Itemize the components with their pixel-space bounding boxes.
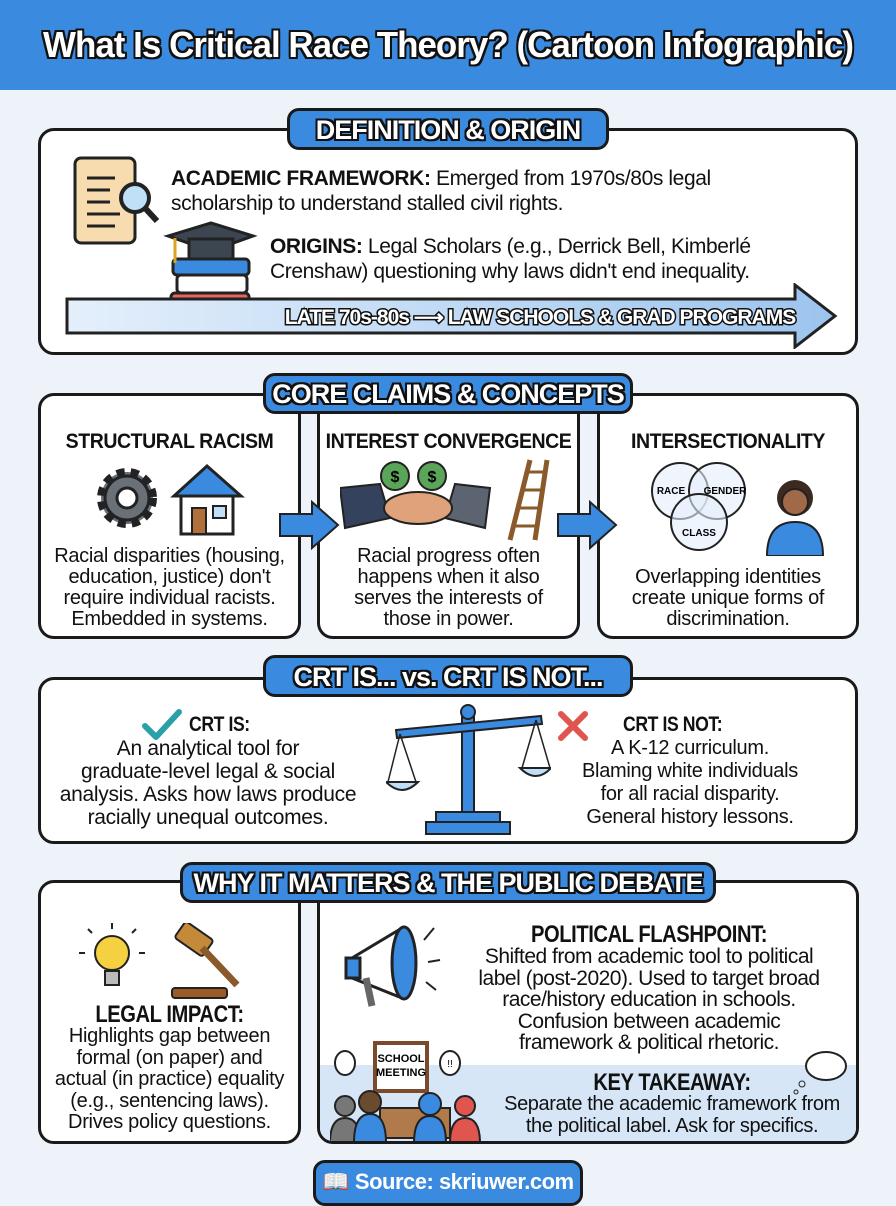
text: CRT is: racially unequal outcomes.: [88, 806, 328, 829]
heading: key takeaway: KEY TAKEAWAY:: [593, 1069, 751, 1096]
heading: STRUCTURAL RACISM: [66, 430, 273, 453]
icon: grad cap and books: [163, 221, 258, 298]
text: CRT is not: A K-12 curriculum.: [611, 737, 769, 759]
badge: definition & origin: [287, 108, 609, 150]
icon: school meeting: !!: [447, 1059, 453, 1070]
heading: INTEREST CONVERGENCE: [326, 430, 571, 453]
text: [54, 545, 285, 630]
text: label (post-2020). Used to target broad: [478, 966, 820, 990]
badge: why it matters: WHY IT MATTERS & THE PUBLIC DEBATE: [194, 868, 702, 898]
icon: scroll with magnifier: [74, 156, 160, 244]
panel: political flashpoint: [317, 880, 859, 1144]
icon: bulb and gavel: [79, 923, 240, 999]
text: education, justice) don't: [68, 566, 270, 588]
header banner: [0, 0, 896, 90]
heading: CRT is not: CRT IS NOT:: [623, 713, 722, 736]
icon: venn and person: RACE: [657, 486, 685, 497]
icon: megaphone: [344, 925, 440, 1007]
text: CRT is: graduate-level legal & social: [81, 760, 335, 783]
text: origins: Crenshaw) questioning why laws didn't end inequality.: [270, 260, 750, 283]
text: those in power.: [383, 608, 514, 630]
icon: school meeting: SCHOOL: [377, 1053, 425, 1065]
text: [632, 566, 824, 630]
text: CRT is not: for all racial disparity.: [601, 783, 779, 805]
text: Shifted from academic tool to political: [485, 945, 813, 968]
text: academic framework: [171, 167, 711, 215]
text: [354, 545, 544, 630]
text: race/history education in schools.: [502, 988, 796, 1011]
text: the political label. Ask for specifics.: [526, 1114, 818, 1136]
text: [478, 945, 820, 1054]
text: [55, 1025, 284, 1133]
text: discrimination.: [666, 608, 790, 630]
arrow: timeline: LATE 70s-80s ⟶ LAW SCHOOLS & GRAD PROGRAMS: [285, 306, 796, 329]
text: origins: [270, 235, 751, 283]
panel: legal impact: [38, 880, 301, 1144]
text: create unique forms of: [632, 587, 824, 609]
text: Overlapping identities: [635, 566, 821, 588]
icon: scales: [386, 704, 551, 835]
heading: INTERSECTIONALITY: [631, 430, 825, 453]
text: CRT is: [60, 737, 356, 829]
icon: school meeting: [330, 1041, 481, 1141]
heading: CRT is: CRT IS:: [189, 713, 250, 736]
text: Racial disparities (housing,: [54, 545, 285, 567]
text: Separate the academic framework from: [504, 1093, 840, 1115]
icon: handshake money ladder: $: [391, 469, 400, 486]
badge: definition & origin: DEFINITION & ORIGIN: [316, 115, 580, 145]
badge: core claims: CORE CLAIMS & CONCEPTS: [272, 379, 624, 409]
badge: CRT is vs not: CRT IS... vs. CRT IS NOT...: [293, 662, 603, 692]
heading: political flashpoint: POLITICAL FLASHPOINT:: [531, 921, 767, 948]
icon: gear and house: [97, 464, 245, 536]
icon: check: [142, 709, 182, 740]
text: CRT is: analysis. Asks how laws produce: [60, 783, 356, 806]
title: What Is Critical Race Theory? (Cartoon Infographic): [43, 24, 853, 65]
icon: handshake money ladder: [340, 459, 550, 541]
panel: intersectionality: [597, 393, 859, 639]
arrow: 2 to 3: [557, 500, 618, 550]
panel: interest convergence: [317, 393, 580, 639]
footer: source: [313, 1160, 583, 1206]
panel: CRT is vs not: [38, 677, 858, 844]
panel: definition & origin: [38, 128, 858, 355]
text: origins: ORIGINS: Legal Scholars (e.g., Derrick Bell, Kimberlé: [270, 235, 751, 258]
text: academic framework: ACADEMIC FRAMEWORK: Emerged from 1970s/80s legal: [171, 167, 711, 190]
icon: thought cloud: [794, 1051, 847, 1094]
text: CRT is not: General history lessons.: [586, 806, 794, 828]
text: happens when it also: [358, 566, 539, 588]
panel: structural racism: [38, 393, 301, 639]
icon: venn and person: [651, 462, 824, 556]
badge: core claims: [263, 373, 633, 414]
arrow: timeline: [66, 283, 838, 349]
text: framework & political rhetoric.: [519, 1031, 779, 1054]
text: [504, 1093, 840, 1136]
text: Embedded in systems.: [71, 608, 268, 630]
badge: CRT is vs not: [263, 655, 633, 697]
icon: venn and person: GENDER: [704, 486, 747, 497]
text: CRT is not: Blaming white individuals: [582, 760, 798, 782]
icon: handshake money ladder: $: [428, 469, 437, 486]
takeaway band: [320, 1065, 862, 1155]
text: CRT is: An analytical tool for: [117, 737, 299, 760]
text: CRT is not: [582, 737, 798, 828]
heading: LEGAL IMPACT:: [95, 1001, 244, 1028]
text: Confusion between academic: [518, 1010, 780, 1032]
badge: why it matters: [180, 862, 716, 903]
text: actual (in practice) equality: [55, 1068, 284, 1090]
text: Highlights gap between: [69, 1025, 270, 1047]
text: (e.g., sentencing laws).: [70, 1090, 269, 1112]
text: academic framework: scholarship to understand stalled civil rights.: [171, 192, 563, 215]
text: Racial progress often: [357, 545, 540, 567]
icon: school meeting: MEETING: [376, 1067, 426, 1079]
arrow: 1 to 2: [279, 500, 340, 550]
text: formal (on paper) and: [76, 1046, 263, 1068]
text: serves the interests of: [354, 587, 543, 609]
icon: x: [558, 711, 588, 741]
footer: source: 📖 Source: skriuwer.com: [322, 1169, 574, 1194]
text: Drives policy questions.: [68, 1111, 271, 1133]
text: require individual racists.: [64, 587, 276, 609]
icon: venn and person: CLASS: [682, 528, 716, 539]
